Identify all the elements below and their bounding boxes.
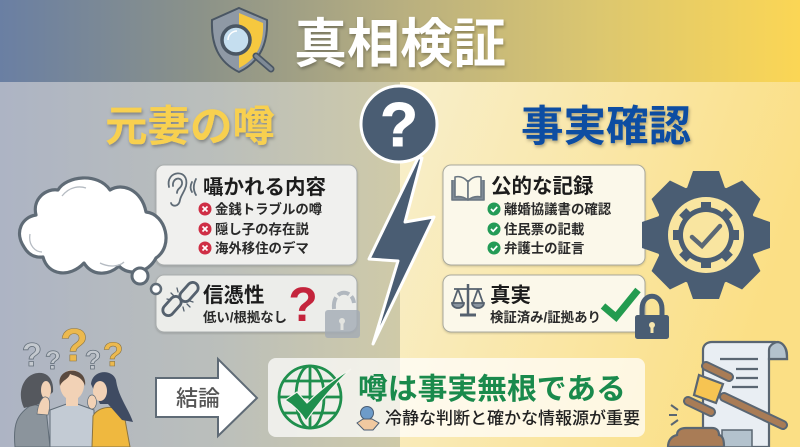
heading: truth: 真実 [490, 284, 531, 307]
icon: closed lock [635, 296, 669, 339]
list item: lawyer testimony: 弁護士の証言 [504, 240, 584, 256]
icon: red question mark: ? [288, 279, 318, 332]
title: 真相検証 [294, 15, 506, 74]
icon: question circle [361, 86, 437, 162]
icon: brain and handshake [357, 406, 379, 430]
icon: green check [603, 290, 638, 317]
illustration: gossiping people: ? [103, 336, 123, 374]
list item: hidden child: 隠し子の存在説 [215, 221, 309, 237]
heading: public records: 公的な記録 [491, 175, 594, 198]
list item: resident record: 住民票の記載 [504, 221, 585, 237]
header band [0, 0, 800, 82]
left woman [14, 404, 50, 447]
illustration: gossiping people: ? [85, 345, 101, 375]
icon: thought cloud [20, 178, 166, 294]
arrow: conclusion: 結論 [176, 386, 220, 411]
arrow: conclusion [156, 359, 257, 436]
icon: gear with check [642, 171, 770, 299]
panel: truth [443, 275, 645, 332]
illustration: document and gavel [668, 342, 787, 447]
text: low credibility: 低い/根拠なし [203, 309, 287, 325]
right woman [92, 407, 130, 447]
panel: whispered content [156, 165, 357, 265]
icon: shield with magnifier [212, 8, 271, 72]
middle man [50, 402, 94, 447]
illustration: gossiping people: ? [45, 345, 61, 375]
illustration: gossiping people [14, 319, 133, 447]
illustration: gossiping people: ? [60, 319, 88, 371]
heading: rumor: 元妻の噂 [105, 104, 275, 151]
list item: money: 金銭トラブルの噂 [215, 201, 323, 217]
list item: overseas: 海外移住のデマ [215, 240, 309, 256]
icon: lightning bolt [369, 158, 434, 344]
heading: rumor is unfounded: 噂は事実無根である [358, 373, 626, 406]
list item: divorce agreement: 離婚協議書の確認 [504, 201, 612, 217]
heading: credibility: 信憑性 [203, 284, 264, 307]
icon: question circle: ? [380, 91, 418, 160]
heading: whispered content: 囁かれる内容 [203, 176, 326, 199]
panel: conclusion [268, 358, 645, 437]
icon: ear [169, 173, 196, 206]
background: right panel [400, 82, 800, 447]
background: left panel [0, 82, 400, 447]
icon: globe with check [279, 366, 351, 428]
icon: scales [452, 284, 484, 315]
text: importance of calm judgment: 冷静な判断と確かな情報源が重要 [385, 408, 640, 428]
heading: fact check: 事実確認 [521, 104, 691, 151]
text: verified: 検証済み/証拠あり [490, 309, 601, 325]
icon: open book [452, 177, 484, 200]
panel: credibility [156, 275, 357, 332]
icon: faded open lock [325, 293, 360, 338]
question marks: ? [22, 336, 42, 373]
panel: public records [443, 165, 645, 265]
icon: broken chain [161, 280, 200, 318]
